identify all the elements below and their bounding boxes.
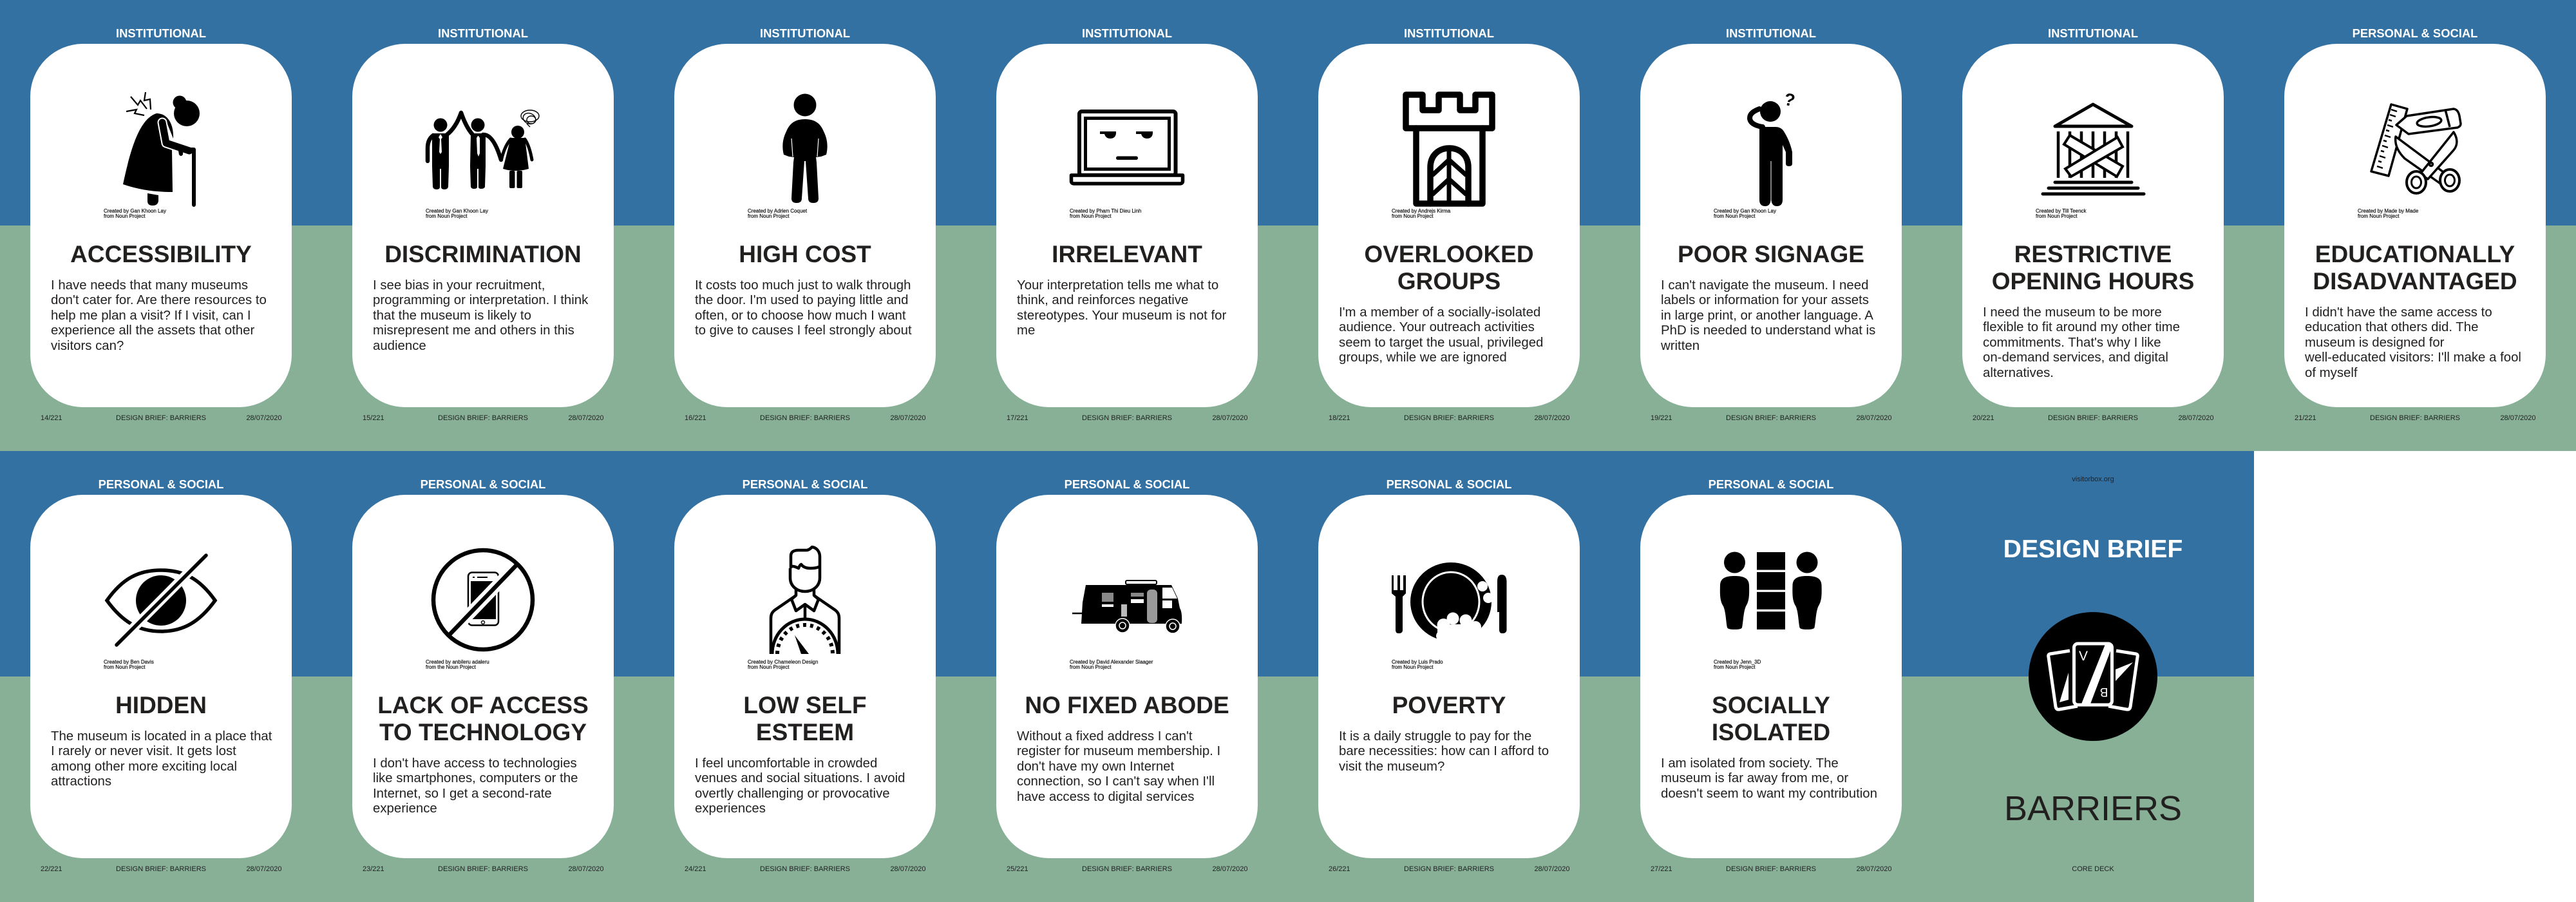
deck label: CORE DECK <box>2072 865 2114 873</box>
icon credit: Created by Ben Davis <box>104 658 154 665</box>
body text: I can't navigate the museum. I need <box>1661 278 1868 293</box>
heading <box>1364 241 1534 294</box>
body text: I don't have access to technologies <box>373 756 577 771</box>
body text: alternatives. <box>1983 366 2054 380</box>
panel: high cost card <box>644 0 966 451</box>
body text: doesn't seem to want my contribution <box>1661 786 1877 800</box>
body text: I rarely or never visit. It gets lost <box>51 744 236 758</box>
body text <box>373 756 578 817</box>
cover title: barriers: BARRIERS <box>2004 789 2182 828</box>
panel: no fixed abode card <box>966 451 1288 902</box>
heading: TO TECHNOLOGY <box>379 719 587 745</box>
heading <box>1992 241 2194 294</box>
footer: 28/07/2020 <box>246 865 282 873</box>
footer: 28/07/2020 <box>1534 865 1570 873</box>
body text <box>1983 305 2180 380</box>
heading: HIDDEN <box>115 692 207 718</box>
footer: 21/221 <box>2295 414 2316 422</box>
body text: visit the museum? <box>1339 759 1444 773</box>
heading <box>1640 692 1902 746</box>
icon credit: Created by Till Teenck <box>2036 207 2087 214</box>
body text: seem to target the usual, privileged <box>1339 335 1543 349</box>
body text: connection, so I can't say when I'll <box>1017 774 1215 789</box>
icon credit <box>104 658 154 670</box>
body text: like smartphones, computers or the <box>373 771 578 785</box>
white card <box>1318 495 1580 858</box>
heading: OPENING HOURS <box>1992 268 2194 294</box>
panel: lack of access to technology card <box>322 451 644 902</box>
white card <box>996 495 1258 858</box>
panel: accessibility card <box>0 0 322 451</box>
white card <box>30 44 292 407</box>
footer <box>644 865 966 874</box>
icon credit: Created by Luis Prado <box>1392 658 1443 665</box>
category label: PERSONAL & SOCIAL <box>99 477 223 491</box>
heading: POOR SIGNAGE <box>1678 241 1864 267</box>
icon: confused man scratching head <box>1747 90 1797 206</box>
footer: 15/221 <box>363 414 384 422</box>
icon credit: from Noun Project <box>748 664 789 670</box>
heading: EDUCATIONALLY <box>2315 241 2515 267</box>
category label: INSTITUTIONAL <box>1082 26 1172 40</box>
icon: man with low gauge dial <box>768 544 842 655</box>
footer: DESIGN BRIEF: BARRIERS <box>1082 414 1172 422</box>
icon credit: Created by Gan Khoon Lay <box>1714 207 1776 214</box>
footer: 27/221 <box>1651 865 1672 873</box>
icon credit: Created by Made by Made <box>2358 207 2418 214</box>
heading: RESTRICTIVE <box>2014 241 2172 267</box>
body text: education that others did. The <box>2305 320 2478 334</box>
icon credit <box>104 207 166 219</box>
footer: 28/07/2020 <box>1534 414 1570 422</box>
body text <box>1339 729 1549 774</box>
icon credit: from Noun Project <box>1714 213 1755 219</box>
white card <box>996 44 1258 407</box>
white card <box>1318 44 1580 407</box>
logo: three cards in black circle <box>2029 612 2157 741</box>
category label: PERSONAL & SOCIAL <box>1065 477 1189 491</box>
footer: 25/221 <box>1007 865 1028 873</box>
icon credit <box>426 660 489 670</box>
footer: 28/07/2020 <box>2178 414 2214 422</box>
footer <box>41 414 282 422</box>
body text: among other more exciting local <box>51 759 237 773</box>
body text: I need the museum to be more <box>1983 305 2162 320</box>
white card <box>1640 44 1902 407</box>
body text <box>373 278 589 353</box>
icon credit <box>1070 207 1141 219</box>
footer: DESIGN BRIEF: BARRIERS <box>760 414 850 422</box>
icon credit: from Noun Project <box>426 213 467 219</box>
heading: POVERTY <box>1392 692 1506 718</box>
icon: castle tower <box>1403 91 1495 207</box>
body text <box>1017 278 1226 338</box>
body text: that the museum is likely to <box>373 308 531 322</box>
heading: GROUPS <box>1397 268 1501 294</box>
body text: The museum is located in a place that <box>51 729 272 744</box>
icon credit: from Noun Project <box>1714 664 1755 670</box>
body text: It is a daily struggle to pay for the <box>1339 729 1531 744</box>
icon: prohibited smartphone <box>431 548 535 652</box>
icon credit <box>1392 660 1443 670</box>
body text: labels or information for your assets <box>1661 293 1869 307</box>
white card <box>352 495 614 858</box>
icon: man with hands in empty pockets <box>782 94 828 203</box>
body text <box>51 278 267 353</box>
body text: venues and social situations. I avoid <box>695 771 905 785</box>
panel: cover card <box>1932 451 2254 902</box>
icon: crossed-out eye <box>104 553 218 647</box>
logo: three cards in black circle: B <box>2100 685 2108 698</box>
heading: IRRELEVANT <box>1052 241 1202 267</box>
body text: I have needs that many museums <box>51 278 248 293</box>
body text: Without a fixed address I can't <box>1017 729 1193 744</box>
footer: 28/07/2020 <box>890 865 926 873</box>
footer: 28/07/2020 <box>246 414 282 422</box>
body text: think, and reinforces negative <box>1017 293 1188 307</box>
category label: PERSONAL & SOCIAL <box>1709 477 1833 491</box>
footer <box>41 865 282 873</box>
body text: Your interpretation tells me what to <box>1017 278 1218 293</box>
category label: PERSONAL & SOCIAL <box>743 477 867 491</box>
icon: two men high-fiving beside excluded woman <box>425 110 540 189</box>
footer: DESIGN BRIEF: BARRIERS <box>2048 414 2138 422</box>
category label: INSTITUTIONAL <box>1726 26 1816 40</box>
footer <box>322 865 644 874</box>
body text <box>695 756 905 817</box>
footer: 18/221 <box>1329 414 1350 422</box>
icon credit <box>426 207 488 219</box>
body text: visitors can? <box>51 339 124 353</box>
footer: 28/07/2020 <box>890 414 926 422</box>
panel: low self esteem card <box>644 451 966 902</box>
category label: INSTITUTIONAL <box>760 26 850 40</box>
body text <box>51 729 272 789</box>
footer: 23/221 <box>363 865 384 873</box>
body text: I feel uncomfortable in crowded <box>695 756 877 771</box>
body text: experience <box>373 801 437 816</box>
heading: OVERLOOKED <box>1364 241 1534 267</box>
panel: educationally disadvantaged card <box>2254 0 2576 451</box>
footer <box>685 414 926 422</box>
body text: museum is designed for <box>2305 335 2444 349</box>
heading: NO FIXED ABODE <box>1025 692 1229 718</box>
panel: socially isolated card <box>1610 451 1932 902</box>
footer: 22/221 <box>41 865 62 873</box>
body text: flexible to fit around my other time <box>1983 320 2180 334</box>
footer <box>1329 414 1570 422</box>
footer <box>1610 865 1932 874</box>
footer <box>2295 414 2536 422</box>
heading <box>2313 241 2517 294</box>
panel: overlooked groups card <box>1288 0 1610 451</box>
category label: INSTITUTIONAL <box>1404 26 1494 40</box>
footer: DESIGN BRIEF: BARRIERS <box>1404 865 1494 873</box>
footer: 28/07/2020 <box>1212 865 1248 873</box>
panel: hidden card <box>0 451 322 902</box>
body text: museum is far away from me, or <box>1661 771 1848 785</box>
white card <box>30 495 292 858</box>
white card <box>674 495 936 858</box>
body text <box>1661 278 1875 353</box>
icon: ruler, eraser and scissors <box>2370 103 2462 195</box>
body text: PhD is needed to understand what is <box>1661 323 1875 338</box>
footer: 14/221 <box>41 414 62 422</box>
footer: 16/221 <box>685 414 706 422</box>
cover title: design brief: DESIGN BRIEF <box>2003 535 2183 563</box>
body text: me <box>1017 323 1035 338</box>
icon: elderly woman with cane and back pain <box>123 91 200 207</box>
icon credit: from Noun Project <box>2358 213 2399 219</box>
body text <box>1339 305 1543 365</box>
body text <box>2305 305 2521 380</box>
body text <box>1661 756 1877 801</box>
body text <box>1017 729 1220 805</box>
heading: ESTEEM <box>756 719 854 745</box>
body text: written <box>1661 339 1700 353</box>
white card <box>1640 495 1902 858</box>
white card <box>352 44 614 407</box>
icon credit: from Noun Project <box>1392 664 1433 670</box>
icon credit: Created by Andrejs Kirma <box>1392 207 1450 214</box>
heading: LOW SELF <box>743 692 867 718</box>
icon credit: from Noun Project <box>748 213 789 219</box>
body text: misrepresent me and others in this <box>373 323 574 338</box>
body text: don't have my own Internet <box>1017 759 1174 773</box>
icon credit <box>2358 207 2419 219</box>
body text <box>695 278 912 338</box>
panel: restrictive opening hours card <box>1932 0 2254 451</box>
footer <box>1973 414 2214 422</box>
footer: 28/07/2020 <box>568 414 604 422</box>
icon credit: Created by Gan Khoon Lay <box>104 207 166 214</box>
footer <box>363 414 604 422</box>
body text: overtly challenging or provocative <box>695 786 890 800</box>
footer: DESIGN BRIEF: BARRIERS <box>438 865 528 873</box>
footer: DESIGN BRIEF: BARRIERS <box>760 865 850 873</box>
body text: I'm a member of a socially-isolated <box>1339 305 1540 320</box>
category label: INSTITUTIONAL <box>2048 26 2138 40</box>
footer <box>1288 865 1610 874</box>
icon credit <box>1070 660 1153 670</box>
body text: register for museum membership. I <box>1017 744 1220 758</box>
footer <box>966 865 1288 874</box>
panel: discrimination card <box>322 0 644 451</box>
body text: groups, while we are ignored <box>1339 350 1507 365</box>
footer: DESIGN BRIEF: BARRIERS <box>1082 865 1172 873</box>
category label: INSTITUTIONAL <box>438 26 528 40</box>
icon: confused man scratching head: ? <box>1783 90 1797 110</box>
body text: bare necessities: how can I afford to <box>1339 744 1549 758</box>
footer: DESIGN BRIEF: BARRIERS <box>1726 865 1816 873</box>
white card <box>1962 44 2224 407</box>
body text: help me plan a visit? If I visit, can I <box>51 308 251 322</box>
category label: PERSONAL & SOCIAL <box>421 477 545 491</box>
footer: 28/07/2020 <box>1212 414 1248 422</box>
icon credit <box>1392 207 1450 219</box>
icon credit: Created by Jenn_3D <box>1714 658 1761 665</box>
icon credit: Created by Gan Khoon Lay <box>426 207 488 214</box>
heading: LACK OF ACCESS <box>377 692 589 718</box>
footer: DESIGN BRIEF: BARRIERS <box>2370 414 2460 422</box>
footer: 24/221 <box>685 865 706 873</box>
heading: DISADVANTAGED <box>2313 268 2517 294</box>
icon credit <box>748 660 818 670</box>
heading <box>352 692 614 746</box>
body text: I see bias in your recruitment, <box>373 278 545 293</box>
heading: SOCIALLY <box>1712 692 1830 718</box>
body text: stereotypes. Your museum is not for <box>1017 308 1226 322</box>
body text: of myself <box>2305 366 2358 380</box>
footer: DESIGN BRIEF: BARRIERS <box>116 414 206 422</box>
footer: 28/07/2020 <box>1856 865 1892 873</box>
footer: 28/07/2020 <box>2500 414 2536 422</box>
icon credit: from Noun Project <box>104 664 145 670</box>
panel: poverty card <box>1288 451 1610 902</box>
footer: DESIGN BRIEF: BARRIERS <box>438 414 528 422</box>
body text: commitments. That's why I like <box>1983 335 2161 349</box>
icon credit: Created by David Alexander Slaager <box>1070 658 1153 665</box>
footer <box>1007 414 1248 422</box>
icon credit <box>2036 207 2087 219</box>
body text: attractions <box>51 774 111 789</box>
footer: DESIGN BRIEF: BARRIERS <box>1726 414 1816 422</box>
heading: ACCESSIBILITY <box>70 241 252 267</box>
footer <box>1651 414 1892 422</box>
icon credit <box>1714 660 1761 670</box>
body text: in large print, or another language. A <box>1661 308 1873 322</box>
icon credit: from Noun Project <box>104 213 145 219</box>
icon credit: from Noun Project <box>1070 213 1111 219</box>
body text: well-educated visitors: I'll make a fool <box>2305 350 2521 365</box>
icon credit: from Noun Project <box>1070 664 1111 670</box>
panel: irrelevant card <box>966 0 1288 451</box>
category label: INSTITUTIONAL <box>116 26 206 40</box>
body text: on-demand services, and digital <box>1983 350 2168 365</box>
body text: audience <box>373 339 426 353</box>
heading <box>674 692 936 746</box>
icon: laptop with unimpressed face <box>1069 110 1185 186</box>
body text: Internet, so I get a second-rate <box>373 786 552 800</box>
website address: visitorbox.org <box>2072 475 2114 483</box>
category label: PERSONAL & SOCIAL <box>2353 26 2477 40</box>
heading: HIGH COST <box>739 241 871 267</box>
body text: audience. Your outreach activities <box>1339 320 1535 334</box>
footer: 28/07/2020 <box>1856 414 1892 422</box>
icon credit: Created by Adrien Coquet <box>748 207 807 214</box>
body text: the door. I'm used to paying little and <box>695 293 908 307</box>
footer: 28/07/2020 <box>568 865 604 873</box>
body text: experience all the assets that other <box>51 323 254 338</box>
footer: DESIGN BRIEF: BARRIERS <box>116 865 206 873</box>
body text: have access to digital services <box>1017 790 1194 804</box>
body text: often, or to choose how much I want <box>695 308 906 322</box>
icon: two people separated by a wall <box>1719 552 1823 630</box>
icon: boarded-up museum building <box>2041 103 2146 196</box>
body text: I am isolated from society. The <box>1661 756 1839 771</box>
footer: 26/221 <box>1329 865 1350 873</box>
footer: DESIGN BRIEF: BARRIERS <box>1404 414 1494 422</box>
icon credit: from Noun Project <box>1392 213 1433 219</box>
body text: It costs too much just to walk through <box>695 278 911 293</box>
icon credit <box>748 207 808 219</box>
panel: poor signage card <box>1610 0 1932 451</box>
body text: to give to causes I feel strongly about <box>695 323 912 338</box>
heading: ISOLATED <box>1712 719 1830 745</box>
heading: DISCRIMINATION <box>384 241 582 267</box>
footer: 19/221 <box>1651 414 1672 422</box>
logo: three cards in black circle: V <box>2079 649 2088 664</box>
icon credit: from Noun Project <box>2036 213 2077 219</box>
white card <box>2284 44 2546 407</box>
icon credit <box>1714 207 1776 219</box>
footer: 20/221 <box>1973 414 1994 422</box>
icon credit: Created by Chameleon Design <box>748 658 818 665</box>
category label: PERSONAL & SOCIAL <box>1387 477 1511 491</box>
icon credit: Created by anbileru adaleru <box>426 658 489 665</box>
icon: fork, nibbled plate and knife <box>1391 562 1507 642</box>
body text: I didn't have the same access to <box>2305 305 2492 320</box>
icon credit: Created by Pham Thi Dieu Linh <box>1070 207 1141 214</box>
footer: 17/221 <box>1007 414 1028 422</box>
icon: camper van <box>1072 579 1183 633</box>
icon credit: from the Noun Project <box>426 664 476 670</box>
white card <box>674 44 936 407</box>
body text: don't cater for. Are there resources to <box>51 293 267 307</box>
body text: experiences <box>695 801 766 816</box>
body text: programming or interpretation. I think <box>373 293 588 307</box>
